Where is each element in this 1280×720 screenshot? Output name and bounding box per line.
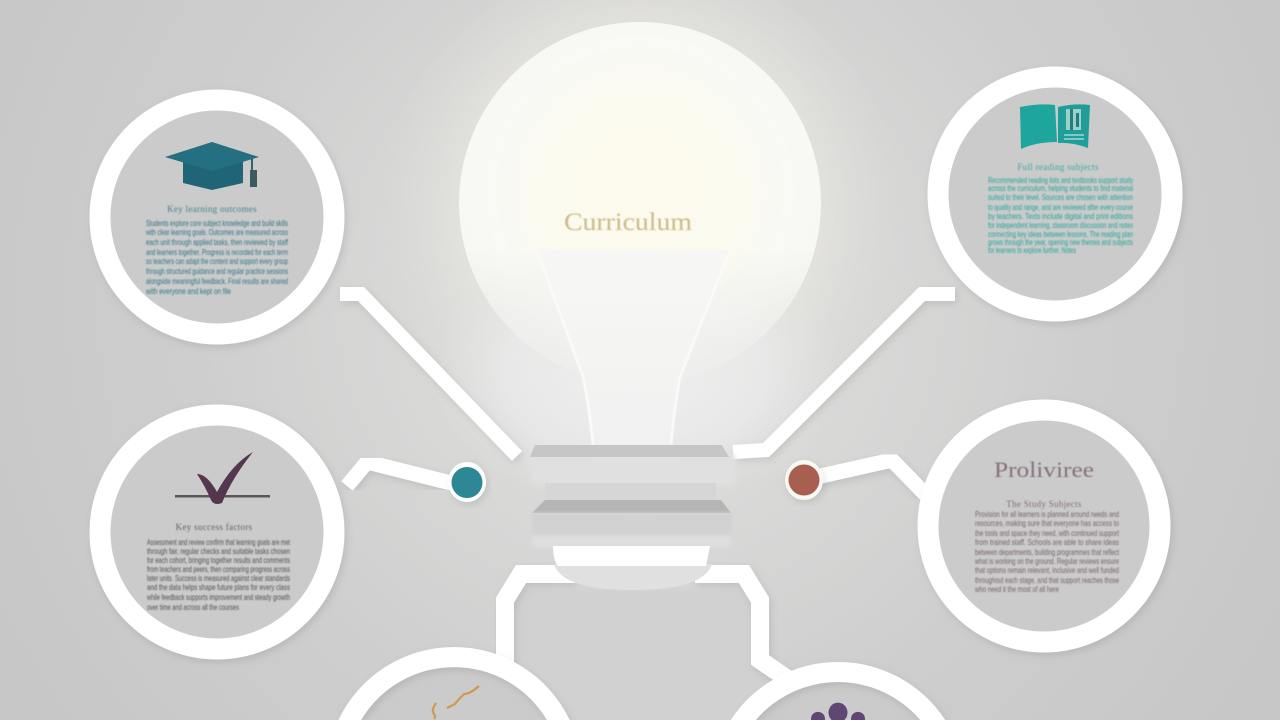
text: graduation: so teachers can adapt the content and support every group (146, 256, 288, 266)
text: provision: between departments, building programmes that reflect (975, 547, 1119, 557)
connector: bottom left (505, 574, 575, 668)
text: assessment: later units. Success is measured against clear standards (147, 573, 290, 583)
text: provision: who need it the most of all here (974, 584, 1059, 594)
text: graduation: and learners together. Progress is recorded for each term (146, 247, 288, 257)
text: assessment: Assessment and review confirm that learning goals are met (147, 537, 290, 547)
text: assessment: Key success factors (176, 522, 253, 532)
text: book: Recommended reading lists and textbooks support study (988, 175, 1134, 185)
icon: orange squiggle (433, 686, 479, 719)
text: book: to quality and range, and are reviewed after every course (988, 202, 1133, 212)
text: assessment: over time and across all the courses (147, 602, 239, 612)
icon: check mark (175, 452, 270, 504)
bulb title: Curriculum (564, 209, 693, 236)
text: book: grows through the year, opening new themes and subjects (988, 237, 1133, 247)
text: provision (974, 499, 1119, 594)
text: book: Full reading subjects (1017, 162, 1099, 172)
connector: top left (340, 294, 517, 456)
bulb globe (459, 22, 821, 327)
text: provision: resources, making sure that everyone has access to (975, 518, 1119, 528)
panel: provision (928, 410, 1160, 642)
panel: assessment (100, 415, 334, 649)
text: provision: throughout each stage, and that support reaches those (975, 575, 1119, 585)
text: book (988, 162, 1134, 255)
panel: bottom left (338, 647, 570, 720)
panel: bottom right (731, 662, 945, 720)
connector: bottom right (695, 574, 792, 682)
text: provision: from trained staff. Schools are able to share ideas (975, 537, 1119, 547)
panel: graduation (100, 100, 334, 334)
text: graduation: with clear learning goals. Outcomes are measured across (145, 227, 288, 237)
dot: brown (785, 460, 823, 500)
text: provision: what is working on the ground. Regular reviews ensure (974, 556, 1119, 566)
text: graduation: each unit through applied tasks, then reviewed by staff (146, 237, 288, 247)
connector: middle right (812, 460, 925, 494)
bulb neck (533, 250, 733, 445)
text: book: across the curriculum, helping students to find material (988, 183, 1133, 193)
bulb screw base (530, 445, 735, 590)
text: book: for independent learning, classroom discussion and notes (988, 220, 1133, 230)
text: graduation: with everyone and kept on file (145, 286, 231, 296)
light bulb (456, 4, 824, 452)
icon: open book (1020, 104, 1090, 149)
text: graduation: through structured guidance and regular practice sessions (146, 266, 288, 276)
text: assessment: for each cohort, bringing together results and comments (147, 555, 290, 565)
heading: provision: Proliviree (994, 457, 1094, 482)
text: assessment: while feedback supports improvement and steady growth (146, 592, 290, 602)
text: graduation: Students explore core subject knowledge and build skills (146, 218, 288, 228)
text: provision: the tools and space they need, with continued support (975, 528, 1119, 538)
text: graduation: alongside meaningful feedback. Final results are shared (146, 276, 288, 286)
text: assessment: from teachers and peers, then comparing progress across (147, 564, 290, 574)
text: book: for learners to explore further. Notes (988, 245, 1076, 255)
text: provision: Provision for all learners is planned around needs and (975, 509, 1119, 519)
text: provision: that options remain relevant, inclusive and well funded (975, 565, 1119, 575)
connector: middle left (347, 462, 455, 486)
icon: people (811, 703, 865, 720)
text: book: suited to their level. Sources are chosen with attention (988, 192, 1133, 202)
connector: top right (733, 294, 955, 452)
text: graduation: Key learning outcomes (167, 204, 257, 214)
text: assessment: through fair, regular checks and suitable tasks chosen (147, 546, 290, 556)
text: book: by teachers. Texts include digital and print editions (988, 211, 1133, 221)
text: book: connecting key ideas between lessons. The reading plan (988, 229, 1133, 239)
dot: teal (448, 462, 486, 502)
text: assessment (146, 522, 290, 612)
text: assessment: and the data helps shape future plans for every class (147, 582, 290, 592)
text: provision: The Study Subjects (1006, 499, 1082, 509)
icon: graduation cap (165, 142, 259, 190)
panel: book (938, 77, 1172, 311)
text: graduation (145, 204, 288, 296)
